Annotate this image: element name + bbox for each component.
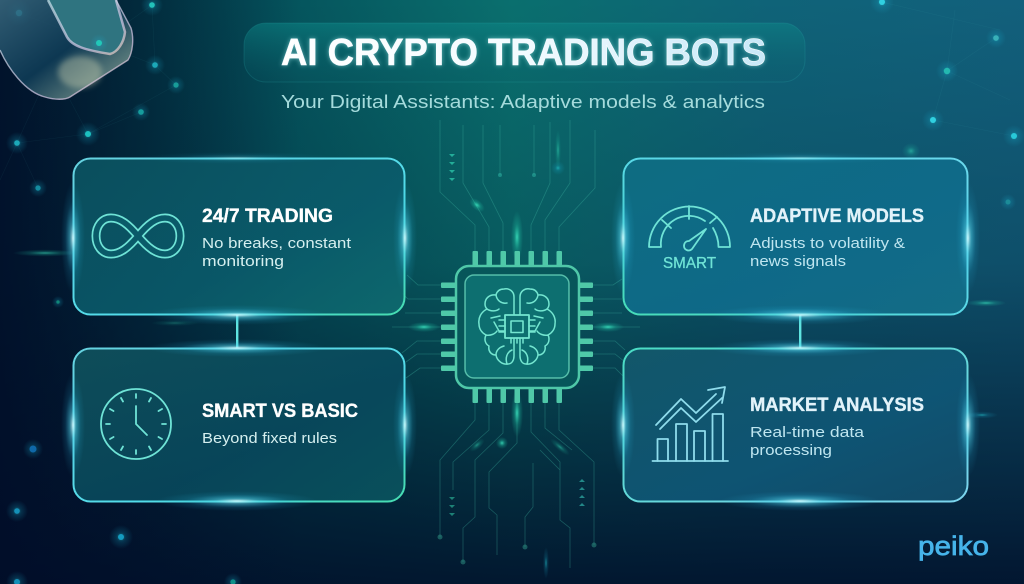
title: AI CRYPTO TRADING BOTS bbox=[281, 32, 766, 74]
circuit traces bbox=[392, 120, 640, 579]
logo: peiko: peiko bbox=[918, 531, 989, 561]
connector right bbox=[799, 315, 801, 348]
icon: bar chart with arrow bbox=[652, 387, 728, 461]
description: Real-time data bbox=[750, 424, 865, 441]
description: Beyond fixed rules bbox=[202, 430, 337, 447]
chip pins bbox=[441, 251, 593, 403]
panel: smart vs basic bbox=[61, 339, 417, 511]
panel: adaptive models bbox=[611, 152, 980, 325]
description: No breaks, constant bbox=[202, 235, 352, 252]
icon: gauge bbox=[649, 206, 730, 272]
icon: infinity bbox=[96, 218, 180, 254]
icon: clock bbox=[101, 389, 171, 459]
subtitle: Your Digital Assistants: Adaptive models & analytics bbox=[281, 92, 765, 112]
glass ring decoration bbox=[0, 0, 133, 99]
heading: ADAPTIVE MODELS bbox=[750, 206, 924, 227]
description: Adjusts to volatility & bbox=[750, 235, 905, 252]
description: monitoring bbox=[202, 253, 284, 270]
icon: brain with processor bbox=[479, 289, 555, 364]
description: processing bbox=[750, 442, 832, 459]
description bbox=[750, 235, 905, 270]
connector left bbox=[236, 315, 238, 348]
central chip bbox=[441, 251, 593, 403]
heading: MARKET ANALYSIS bbox=[750, 395, 924, 416]
heading: SMART VS BASIC bbox=[202, 401, 358, 422]
panel: 24/7 trading bbox=[61, 152, 417, 325]
panel: market analysis bbox=[611, 339, 980, 511]
description: news signals bbox=[750, 253, 846, 270]
title pill bbox=[244, 23, 805, 82]
description bbox=[202, 235, 352, 270]
gauge label: SMART bbox=[663, 255, 717, 272]
description bbox=[750, 424, 865, 459]
heading: 24/7 TRADING bbox=[202, 206, 333, 227]
